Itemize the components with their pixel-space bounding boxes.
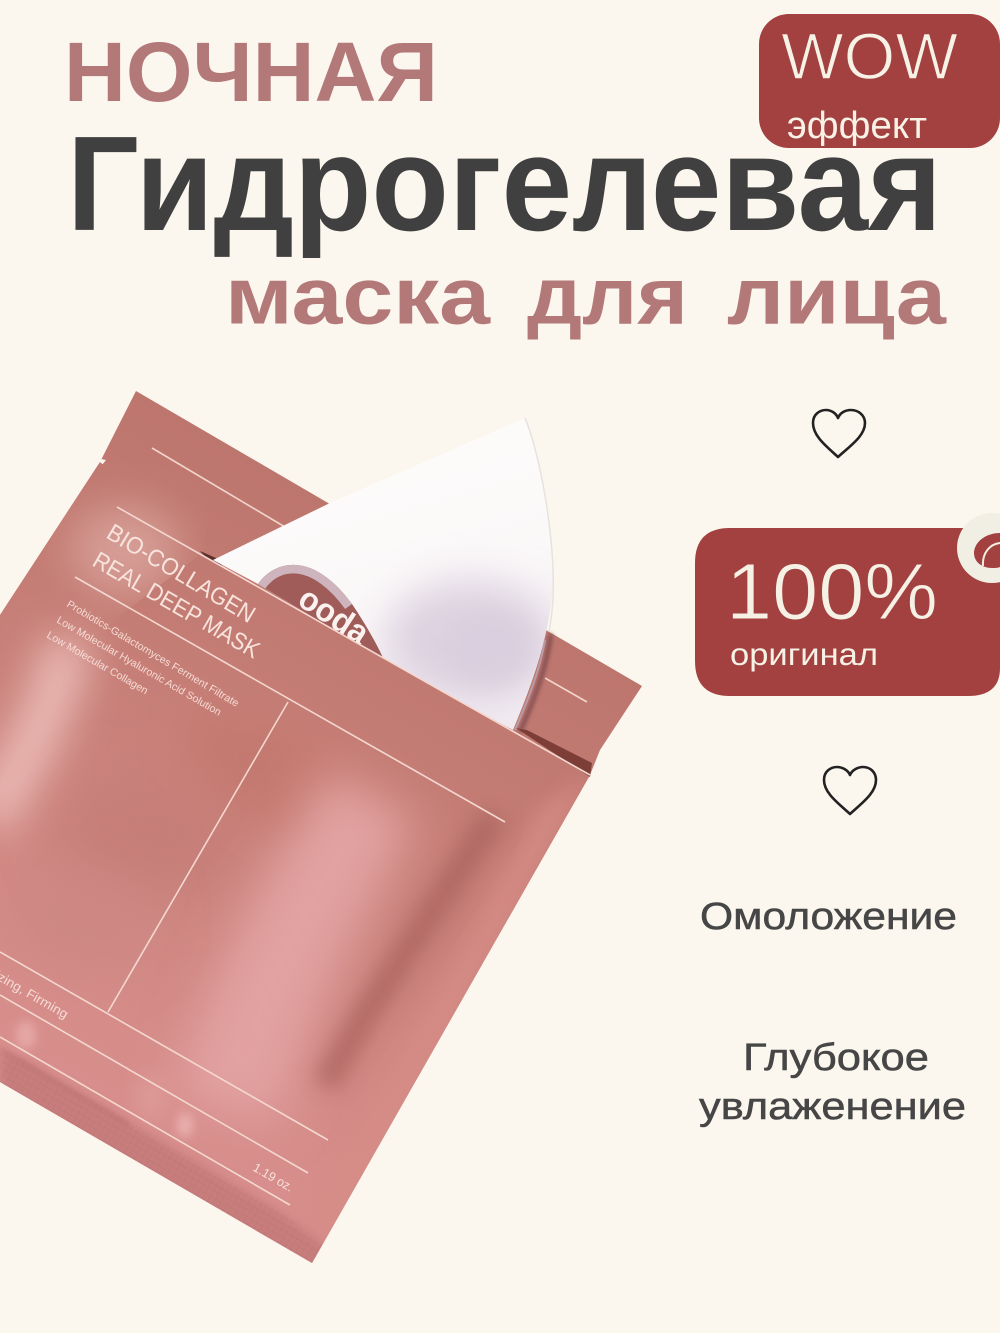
product: collagen mask sachet — [0, 391, 642, 1270]
badge text: эффект: эффект — [787, 105, 927, 147]
opening with inner sachet — [258, 564, 382, 656]
benefit: deep hydration: Глубокое — [743, 1037, 929, 1079]
sheet darkened lower rim — [520, 634, 551, 732]
badge: WOW effect — [759, 14, 1000, 148]
inner sachet lettering: ooda — [292, 579, 377, 652]
sachet notch — [96, 458, 106, 465]
badge: 100% original — [695, 513, 1000, 696]
logo circle — [957, 513, 1000, 583]
icon: heart bottom — [824, 767, 876, 814]
badge number: 100% — [726, 547, 938, 636]
sachet back flap — [0, 391, 642, 1263]
sachet print lines — [0, 507, 590, 1205]
subtitle: маска для лица: маска — [225, 252, 491, 342]
subtitle: маска для лица — [225, 252, 947, 342]
sachet product name: REAL DEEP MASK — [88, 547, 264, 664]
benefit: deep hydration: увлаженение — [699, 1086, 966, 1128]
sachet product name: BIO-COLLAGEN — [102, 519, 260, 629]
title: гидрогелевая: Гидрогелевая — [67, 108, 942, 259]
icon: heart top — [813, 410, 865, 457]
badge text: WOW: WOW — [781, 19, 959, 93]
pocket shadow sliver — [200, 551, 226, 570]
sachet weight: 1.19 oz. — [250, 1160, 296, 1195]
sachet ingredient list: Low Molecular Collagen — [44, 629, 150, 697]
title: ночная: НОЧНАЯ — [64, 25, 438, 119]
badge caption: оригинал — [730, 636, 878, 672]
back flap print lines — [152, 448, 587, 702]
benefit: deep hydration — [699, 1037, 966, 1128]
sachet ingredient list: Probiotics-Galactomyces Ferment Filtrate — [64, 598, 241, 710]
mask sheet — [213, 418, 555, 732]
sachet ingredient list: Low Molecular Hyaluronic Acid Solution — [54, 614, 223, 719]
benefit: rejuvenation: Омоложение — [700, 896, 957, 938]
subtitle: маска для лица: для — [527, 252, 688, 342]
pocket opening dark edge — [516, 728, 592, 777]
sachet front pocket — [0, 462, 590, 1263]
subtitle: маска для лица: лица — [727, 252, 947, 342]
upper-left foil sheen — [70, 505, 180, 595]
foil highlights and creases — [0, 640, 70, 820]
